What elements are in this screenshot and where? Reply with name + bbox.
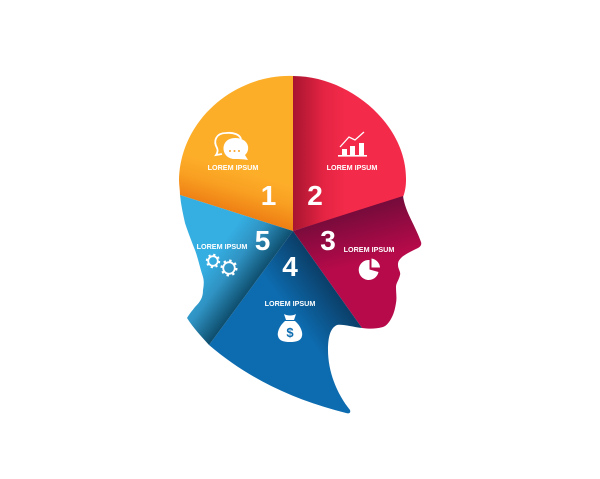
label 5: LOREM IPSUM bbox=[197, 242, 247, 251]
number 4: 4 bbox=[282, 251, 298, 282]
number 1: 1 bbox=[261, 180, 276, 211]
icon: speech bubbles bbox=[215, 133, 248, 160]
icon: money bag bbox=[278, 314, 302, 342]
label 3: LOREM IPSUM bbox=[344, 245, 394, 254]
segment 2: red bbox=[293, 76, 406, 231]
icon: bar chart with trend line bbox=[338, 132, 367, 157]
segment 4: dark blue neck bbox=[209, 231, 362, 413]
icon: money bag: $ bbox=[286, 325, 294, 340]
label 2: LOREM IPSUM bbox=[327, 163, 377, 172]
label 4: LOREM IPSUM bbox=[265, 299, 315, 308]
label 1: LOREM IPSUM bbox=[208, 163, 258, 172]
number 2: 2 bbox=[307, 180, 323, 211]
icon: pie chart bbox=[359, 258, 380, 280]
segment 3: crimson face bbox=[293, 196, 421, 329]
segment 5: light blue bbox=[180, 195, 293, 345]
number 3: 3 bbox=[320, 225, 336, 256]
segment 1: orange bbox=[179, 76, 293, 231]
number 5: 5 bbox=[255, 225, 270, 256]
icon: gears bbox=[207, 255, 236, 275]
